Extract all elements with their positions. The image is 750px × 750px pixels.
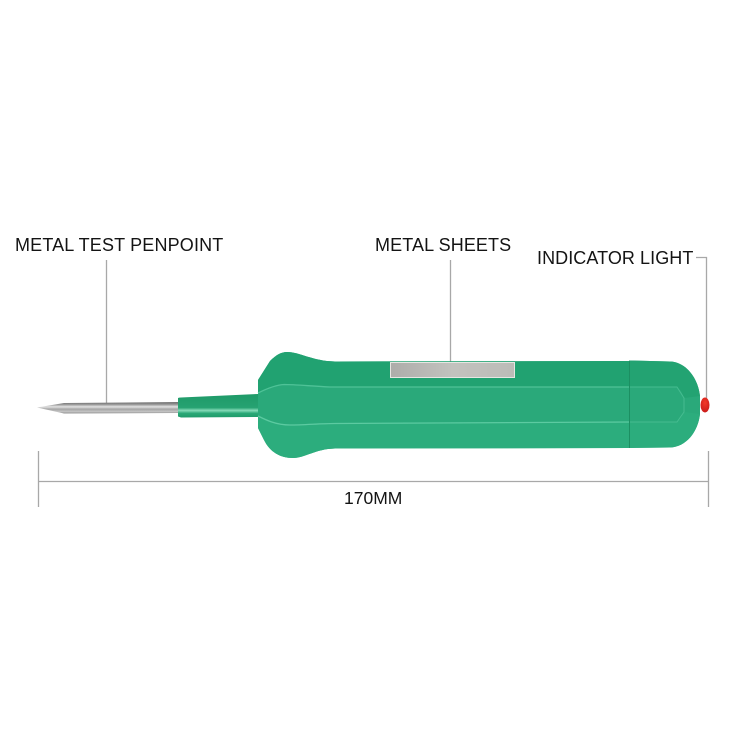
handle upper facet xyxy=(258,352,630,393)
cap highlights xyxy=(630,387,684,422)
cap lower facet xyxy=(629,412,700,448)
cap upper facet xyxy=(629,360,700,398)
metal sheet xyxy=(390,362,514,378)
tester pen illustration xyxy=(37,352,710,458)
dimension label: 170MM xyxy=(344,488,402,508)
dimension line: 170mm xyxy=(38,451,708,507)
cap seam xyxy=(628,361,630,448)
handle lower facet xyxy=(258,416,630,458)
leader line: metal sheets xyxy=(450,260,452,362)
pen handle body xyxy=(258,352,630,458)
label: metal test penpoint: METAL TEST PENPOINT xyxy=(15,235,223,255)
facet highlights xyxy=(258,384,630,393)
leader line: penpoint xyxy=(106,260,108,404)
battery cap xyxy=(629,360,700,448)
label: metal sheets: METAL SHEETS xyxy=(375,235,511,255)
red indicator light xyxy=(700,398,710,412)
leader line: indicator light xyxy=(696,258,706,398)
label: indicator light: INDICATOR LIGHT xyxy=(537,248,693,268)
green cone collar xyxy=(178,394,258,418)
metal needle xyxy=(37,402,178,414)
